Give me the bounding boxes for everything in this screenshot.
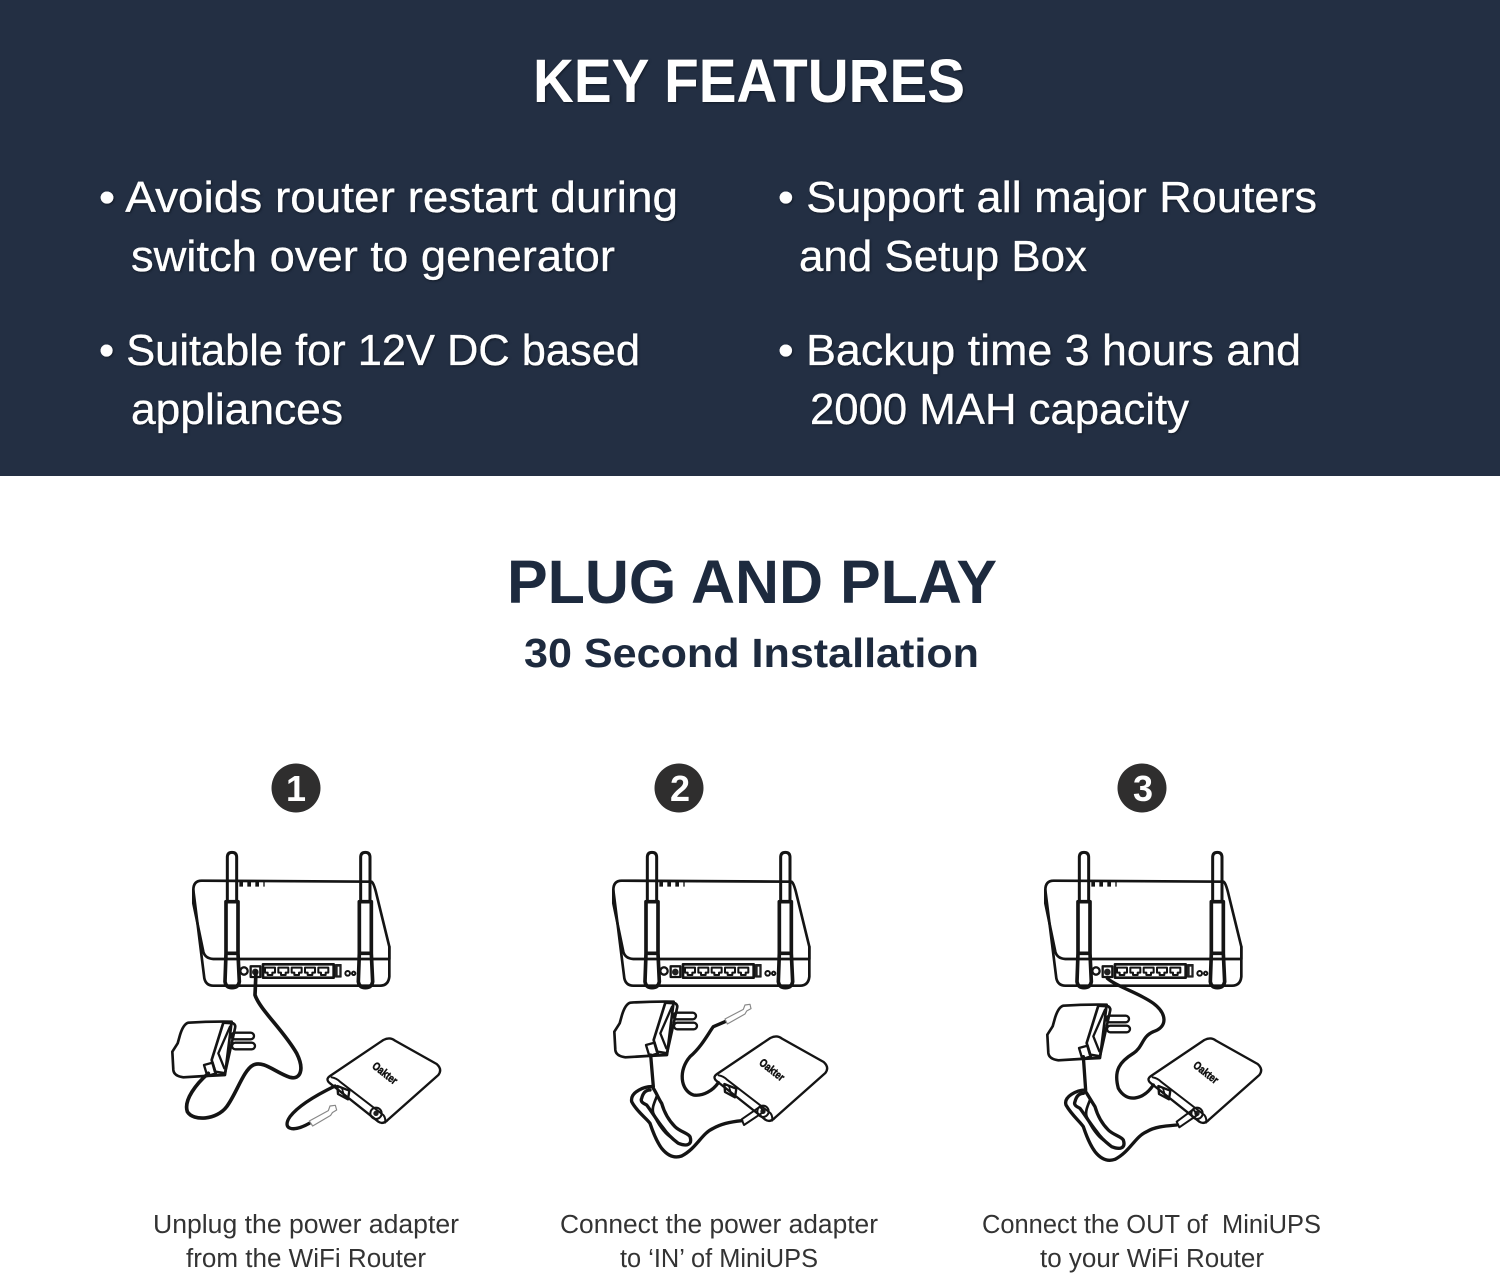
caption: step 3: Connect the OUT of MiniUPS bbox=[982, 1211, 1321, 1239]
step 2 badge: 2 bbox=[670, 768, 690, 809]
feature: backup time: • Backup time 3 hours and bbox=[778, 326, 1301, 375]
panel: key features bbox=[0, 0, 1500, 476]
feature: avoids router restart: • Avoids router restart during bbox=[99, 173, 678, 222]
feature: backup time bbox=[778, 326, 1301, 434]
step 3 badge bbox=[1118, 764, 1166, 812]
diagram: step 1 bbox=[172, 852, 440, 1129]
caption: step 3: to your WiFi Router bbox=[1040, 1245, 1265, 1273]
feature: avoids router restart: switch over to generator bbox=[131, 232, 615, 281]
feature: 12V DC bbox=[99, 326, 640, 434]
diagram: step 2: Oakter bbox=[756, 1057, 787, 1084]
feature: supports routers bbox=[778, 173, 1317, 281]
caption: step 1 bbox=[153, 1211, 460, 1273]
feature: supports routers: • Support all major Routers bbox=[778, 173, 1317, 222]
caption: step 1: from the WiFi Router bbox=[186, 1245, 427, 1273]
step 3 badge: 3 bbox=[1133, 768, 1153, 809]
caption: step 1: Unplug the power adapter bbox=[153, 1211, 460, 1239]
diagram: step 2 bbox=[613, 852, 827, 1157]
diagram: step 3: Oakter bbox=[1190, 1060, 1221, 1087]
feature: avoids router restart bbox=[99, 173, 678, 281]
diagram: step 3 bbox=[1045, 852, 1261, 1160]
heading: plug and play: PLUG AND PLAY bbox=[507, 548, 997, 616]
caption: step 2: Connect the power adapter bbox=[560, 1211, 879, 1239]
step 1 badge bbox=[272, 764, 320, 812]
subheading: 30 second installation: 30 Second Installation bbox=[524, 630, 979, 676]
heading: key features: KEY FEATURES bbox=[533, 47, 965, 115]
feature: supports routers: and Setup Box bbox=[799, 232, 1087, 281]
caption: step 2 bbox=[560, 1211, 879, 1273]
caption: step 2: to ‘IN’ of MiniUPS bbox=[620, 1245, 818, 1273]
step 1 badge: 1 bbox=[286, 768, 306, 809]
diagram: step 1: Oakter bbox=[369, 1060, 400, 1088]
step 2 badge bbox=[654, 764, 704, 812]
caption: step 3 bbox=[982, 1211, 1321, 1273]
feature: 12V DC: appliances bbox=[131, 385, 343, 434]
feature: backup time: 2000 MAH capacity bbox=[810, 385, 1189, 434]
feature: 12V DC: • Suitable for 12V DC based bbox=[99, 326, 640, 375]
